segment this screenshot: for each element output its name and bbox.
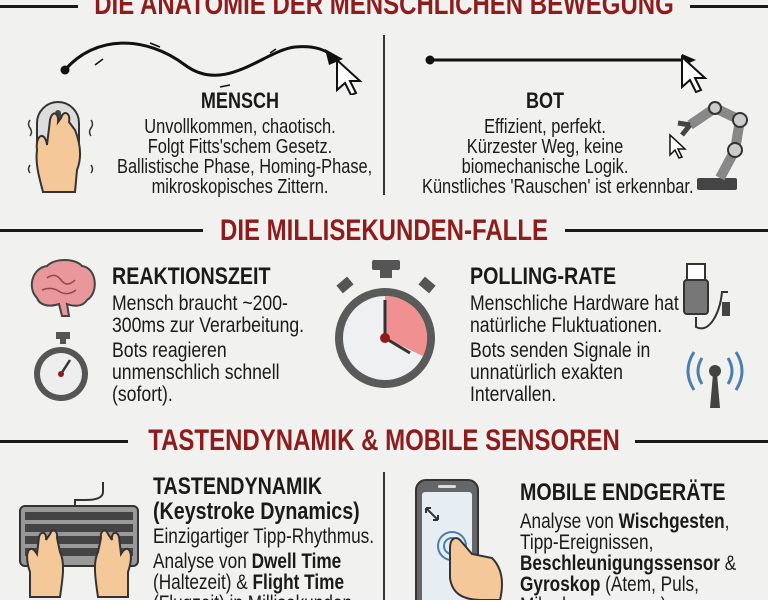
text: polling: Menschliche Hardware hat <box>470 291 679 315</box>
heading: tastendynamik sub <box>153 473 360 525</box>
text: mensch: mikroskopisches Zittern. <box>152 176 328 198</box>
text: mobile: Tipp-Ereignissen, <box>520 531 653 554</box>
text: tastendynamik: (Haltezeit) & Flight Time <box>153 571 344 594</box>
icon: small stopwatch <box>34 332 88 401</box>
text: bot: Künstliches 'Rauschen' ist erkennbar. <box>422 176 694 198</box>
panel: bot <box>422 88 694 198</box>
text: mensch: Unvollkommen, chaotisch. <box>144 116 336 138</box>
text: bot: Effizient, perfekt. <box>484 116 606 138</box>
text: reaktionszeit: Mensch braucht ~200- <box>112 291 288 315</box>
text: polling: unnatürlich exakten <box>470 360 623 384</box>
text: tastendynamik: Einzigartiger Tipp-Rhythmus. Analyse von Dwell Time <box>153 525 374 573</box>
text: polling <box>470 291 679 406</box>
text: bot <box>422 116 694 198</box>
panel: tastendynamik <box>153 473 374 600</box>
text: polling: Intervallen. <box>470 382 556 406</box>
text: bot: biomechanische Logik. <box>462 156 628 178</box>
text: mensch: Ballistische Phase, Homing-Phase, <box>117 156 372 178</box>
panel: reaktionszeit <box>112 263 304 406</box>
text: reaktionszeit: (sofort). <box>112 382 173 406</box>
icon: usb <box>683 263 730 330</box>
icon: human path <box>60 42 362 95</box>
icon: brain <box>30 259 96 317</box>
text: tastendynamik <box>153 525 374 600</box>
heading: tastendynamik sub: (Keystroke Dynamics) <box>153 498 360 525</box>
text: reaktionszeit: unmenschlich schnell <box>112 360 280 384</box>
icon: keyboard with hands <box>19 482 139 598</box>
text: mobile: Gyroskop (Atem, Puls, <box>520 573 699 596</box>
text: reaktionszeit: 300ms zur Verarbeitung. Bots reagieren <box>112 313 304 362</box>
panel: polling-rate <box>470 263 679 406</box>
icon: bot path <box>426 54 708 94</box>
icon: antenna <box>686 351 744 408</box>
heading: tastendynamik: TASTENDYNAMIK & MOBILE SENSOREN <box>148 424 620 457</box>
heading: mensch: MENSCH <box>201 88 279 113</box>
text: mensch <box>117 116 372 198</box>
icon: phone with hand <box>415 479 503 600</box>
text: bot: Kürzester Weg, keine <box>467 136 623 158</box>
text: mensch: Folgt Fitts'schem Gesetz. <box>148 136 332 158</box>
text: reaktionszeit <box>112 291 304 406</box>
heading: bot: BOT <box>526 88 564 113</box>
heading: mobile: MOBILE ENDGERÄTE <box>520 479 726 506</box>
text: mobile <box>520 510 736 600</box>
icon: robot arm <box>669 101 748 190</box>
heading: tastendynamik sub: TASTENDYNAMIK <box>153 473 322 500</box>
panel: mobile <box>520 479 736 600</box>
icon: big stopwatch <box>335 260 436 388</box>
panel: mensch <box>117 88 372 198</box>
text: mobile: Analyse von Wischgesten, <box>520 510 729 533</box>
heading: millisekunden: DIE MILLISEKUNDEN-FALLE <box>220 214 548 247</box>
text: mobile: Beschleunigungssensor & <box>520 552 736 575</box>
text: polling: natürliche Fluktuationen. Bots senden Signale in <box>470 313 662 362</box>
icon: hand on mouse <box>28 101 94 193</box>
heading: reaktionszeit: REAKTIONSZEIT <box>112 263 271 290</box>
heading: polling: POLLING-RATE <box>470 263 616 290</box>
